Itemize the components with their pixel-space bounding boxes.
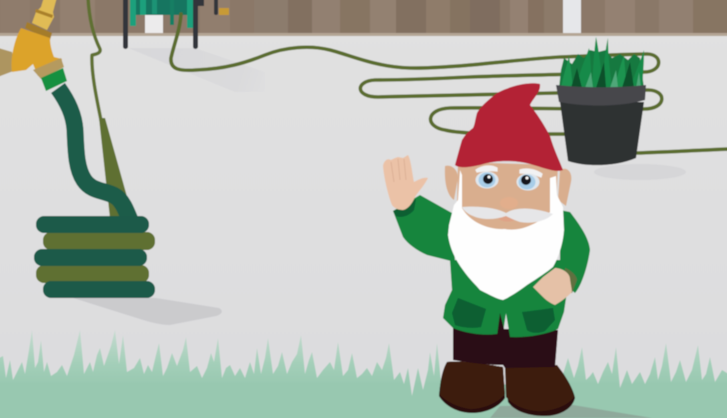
pot body bbox=[560, 102, 644, 165]
green connector bbox=[41, 68, 67, 91]
grass strip bbox=[0, 330, 727, 418]
right eye bbox=[516, 174, 540, 190]
pot rim bbox=[556, 85, 646, 106]
left pocket bbox=[452, 298, 486, 328]
hand on hip bbox=[533, 268, 572, 305]
wooden fence bbox=[0, 0, 727, 36]
grass blades bbox=[559, 37, 644, 88]
sleeve cuff shadow bbox=[393, 199, 416, 217]
face bbox=[457, 162, 558, 231]
gnome bbox=[383, 83, 590, 416]
nozzle top bbox=[32, 0, 57, 30]
dark hose from tap bbox=[58, 88, 130, 220]
reel shadow on wall bbox=[128, 48, 265, 92]
mouth bbox=[497, 215, 518, 222]
white block behind reel bbox=[145, 14, 163, 33]
olive hose ribbon to wall bbox=[88, 0, 133, 218]
coat slit bbox=[497, 313, 506, 337]
right pocket bbox=[522, 308, 555, 333]
right boot bbox=[505, 365, 575, 416]
white fence post bbox=[563, 0, 581, 33]
coat body bbox=[443, 260, 568, 337]
raised arm sleeve bbox=[393, 195, 455, 262]
nose bbox=[500, 197, 518, 209]
left boot bbox=[439, 362, 505, 413]
trousers bbox=[453, 328, 558, 368]
wall pipe bbox=[0, 47, 16, 78]
hose collar bbox=[33, 58, 64, 79]
hose reel bbox=[123, 0, 229, 49]
coil shadow bbox=[70, 297, 222, 325]
eyebrows bbox=[476, 166, 542, 177]
moustache bbox=[462, 207, 553, 223]
red hat bbox=[455, 83, 563, 171]
beard bbox=[448, 170, 564, 300]
stacked hose coil bbox=[34, 216, 155, 298]
ears bbox=[445, 166, 571, 206]
right cuff bbox=[565, 268, 577, 293]
right arm sleeve bbox=[560, 210, 590, 293]
plant pot with grass bbox=[556, 37, 646, 165]
brass tap bbox=[0, 0, 67, 91]
waving hand bbox=[383, 155, 428, 210]
left eye bbox=[476, 172, 498, 188]
gnome ground shadow bbox=[490, 405, 652, 418]
tap body bbox=[11, 28, 62, 76]
collar bbox=[25, 22, 52, 40]
long coiled olive hose bbox=[171, 14, 727, 153]
pot shadow bbox=[594, 164, 686, 180]
